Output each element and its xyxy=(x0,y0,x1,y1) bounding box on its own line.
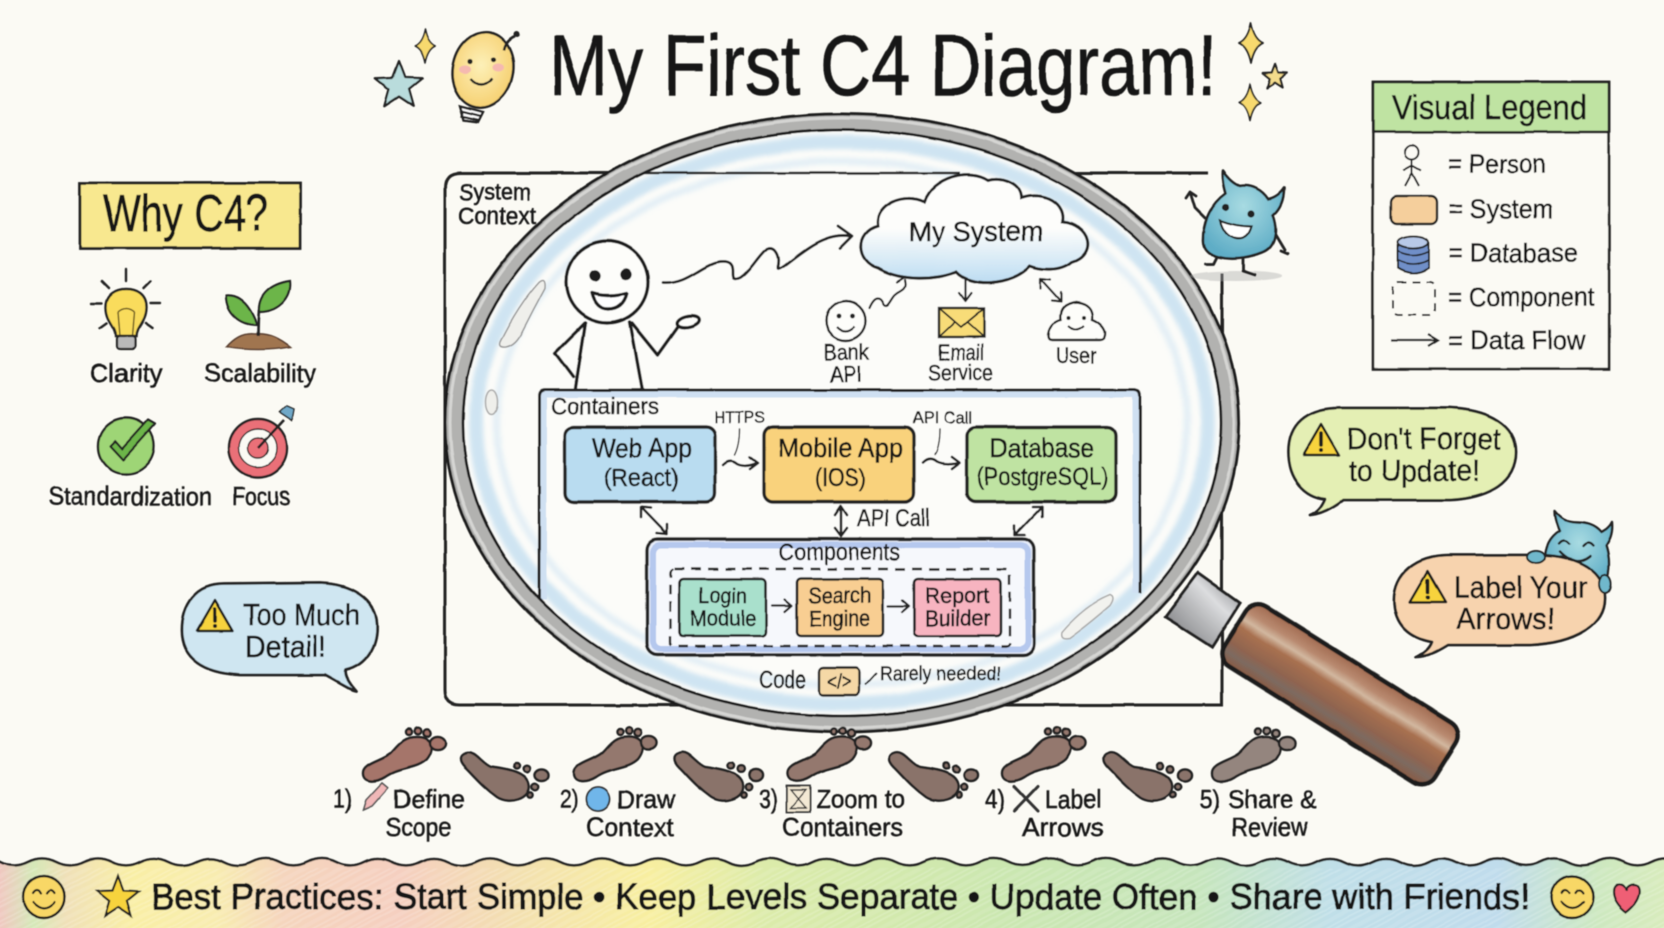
step 3: zoom to containers: 3) xyxy=(759,784,778,814)
heading: why c4: Why C4? xyxy=(103,185,268,243)
callout: too much detail: Too Much xyxy=(243,597,360,632)
external: email service: Email xyxy=(938,340,984,365)
heading: visual legend xyxy=(1373,82,1609,132)
component: report builder: Builder xyxy=(925,606,990,631)
label: system context: System xyxy=(459,179,531,206)
step 5: share and review xyxy=(1200,784,1317,842)
item: standardization xyxy=(48,418,212,511)
callout: don't forget to update xyxy=(1288,408,1516,515)
container: mobile app: (IOS) xyxy=(815,464,866,492)
cloud: my system xyxy=(861,175,1088,283)
container: database xyxy=(967,427,1116,502)
step 4: label arrows xyxy=(985,784,1104,842)
best practices text: Best Practices: Start Simple • Keep Levels Separate • Update Often • Share with Friends! xyxy=(151,876,1530,917)
step 2: draw context: Context xyxy=(586,812,675,842)
step 2: draw context: Draw xyxy=(617,784,675,814)
step 4: label arrows: Arrows xyxy=(1022,812,1104,842)
arrow labels: https and api call: API Call xyxy=(913,408,972,427)
code level row xyxy=(759,664,1001,695)
component: search engine: Search xyxy=(808,583,871,608)
icon: code tag xyxy=(819,668,860,695)
icon: left smiley xyxy=(23,876,65,918)
component: login module: Module xyxy=(690,606,756,631)
monster: peeking over callout xyxy=(1545,511,1612,590)
step 4: label arrows: 4) xyxy=(985,784,1005,814)
container: database: (PostgreSQL) xyxy=(977,463,1108,491)
step 1: define scope: 1) xyxy=(333,784,352,814)
title: My First C4 Diagram! xyxy=(549,18,1217,114)
item: scalability xyxy=(204,281,316,388)
legend: system xyxy=(1391,194,1553,224)
item: clarity: Clarity xyxy=(90,358,163,388)
callout: label your arrows: Label Your xyxy=(1454,570,1587,605)
external system arrows xyxy=(870,277,1061,308)
component: search engine: Engine xyxy=(809,606,870,631)
callout: don't forget to update: Don't Forget xyxy=(1347,421,1501,456)
external: user xyxy=(1048,302,1105,368)
heading: containers: Containers xyxy=(551,393,659,419)
item: focus xyxy=(229,406,294,511)
component: login module: Login xyxy=(698,583,747,608)
step 5: share and review: Review xyxy=(1231,812,1308,842)
item: standardization: Standardization xyxy=(48,481,212,511)
icon: heart xyxy=(1614,885,1639,912)
footprint trail xyxy=(363,728,1295,801)
step 5: share and review: 5) xyxy=(1200,784,1220,814)
component: report builder: Report xyxy=(925,583,989,608)
panel: why c4 xyxy=(48,183,316,511)
icon: crossed pencils xyxy=(1014,786,1038,811)
external: email service xyxy=(928,308,993,385)
container: web app: (React) xyxy=(604,464,679,492)
step 3: zoom to containers: Containers xyxy=(782,812,903,842)
step 5: share and review: Share & xyxy=(1228,784,1317,814)
container arrows xyxy=(641,429,1042,536)
callout: don't forget to update: to Update! xyxy=(1349,453,1480,488)
squiggle arrow: person to system xyxy=(663,226,852,283)
external: bank api: Bank xyxy=(824,340,870,365)
container: web app xyxy=(565,427,715,502)
icon: code tag: </> xyxy=(827,672,852,693)
decoration: stars and sparkles xyxy=(375,23,1287,120)
step 1: define scope: Define xyxy=(393,784,465,814)
panel: components xyxy=(647,539,1034,655)
arrow labels: https and api call: API Call xyxy=(857,505,930,532)
external: email service: Service xyxy=(928,360,993,385)
panel: containers xyxy=(539,390,1140,655)
banner: best practices xyxy=(0,858,1664,928)
icon: right smiley xyxy=(1551,876,1593,918)
step 2: draw context xyxy=(560,784,675,842)
icon: yellow star xyxy=(97,876,139,916)
icon: blue circle xyxy=(586,787,610,811)
item: focus: Focus xyxy=(232,481,290,511)
step 4: label arrows: Label xyxy=(1045,784,1101,814)
panel: visual legend xyxy=(1373,82,1609,369)
container: database: Database xyxy=(990,433,1094,463)
step 2: draw context: 2) xyxy=(560,784,578,814)
external: bank api: API xyxy=(830,362,862,387)
icon: pencil xyxy=(363,783,388,810)
callout: too much detail: Detail! xyxy=(245,629,326,664)
code level row: Rarely needed! xyxy=(880,664,1001,685)
legend: component: = Component xyxy=(1448,282,1594,312)
container: mobile app: Mobile App xyxy=(778,433,903,463)
icon: framed box xyxy=(787,786,810,812)
callout: label your arrows: Arrows! xyxy=(1456,601,1555,636)
arrow labels: https and api call: HTTPS xyxy=(714,408,765,427)
step 1: define scope xyxy=(333,783,465,842)
cloud: my system: My System xyxy=(909,216,1043,247)
monster: waving on frame xyxy=(1186,171,1288,281)
legend: data flow: = Data Flow xyxy=(1448,325,1586,355)
magnifying glass handle xyxy=(1165,573,1464,790)
step 3: zoom to containers: Zoom to xyxy=(816,784,905,814)
legend: database xyxy=(1398,236,1578,273)
legend: component xyxy=(1393,282,1594,315)
arrow labels: https and api call xyxy=(714,408,972,532)
legend: person: = Person xyxy=(1448,149,1546,179)
container: mobile app xyxy=(764,427,914,502)
legend: system: = System xyxy=(1448,194,1553,224)
external: user: User xyxy=(1056,343,1096,368)
component: search engine xyxy=(797,579,883,636)
magnifying glass ring xyxy=(445,114,1239,732)
callout: label your arrows xyxy=(1394,551,1611,657)
legend: data flow xyxy=(1391,325,1586,355)
external: bank api xyxy=(824,301,870,387)
heading: visual legend: Visual Legend xyxy=(1392,89,1587,127)
icon: smiling lightbulb xyxy=(446,27,520,122)
step 1: define scope: Scope xyxy=(386,812,451,842)
component arrows xyxy=(772,600,909,612)
component: report builder xyxy=(914,579,1001,636)
stick figure person xyxy=(555,241,700,388)
label: system context xyxy=(458,179,536,230)
item: clarity xyxy=(90,269,163,388)
heading: components: Components xyxy=(779,539,900,566)
code level row: Code xyxy=(759,667,806,694)
item: scalability: Scalability xyxy=(204,358,316,388)
frame: system context xyxy=(445,173,1222,705)
step 3: zoom to containers xyxy=(759,784,905,842)
legend: person xyxy=(1403,145,1546,186)
legend: database: = Database xyxy=(1448,238,1578,268)
container: web app: Web App xyxy=(592,433,692,463)
magnifying glass lens xyxy=(454,122,1230,724)
callout: too much detail xyxy=(182,583,377,691)
component: login module xyxy=(679,579,766,636)
label: system context: Context xyxy=(458,203,536,230)
